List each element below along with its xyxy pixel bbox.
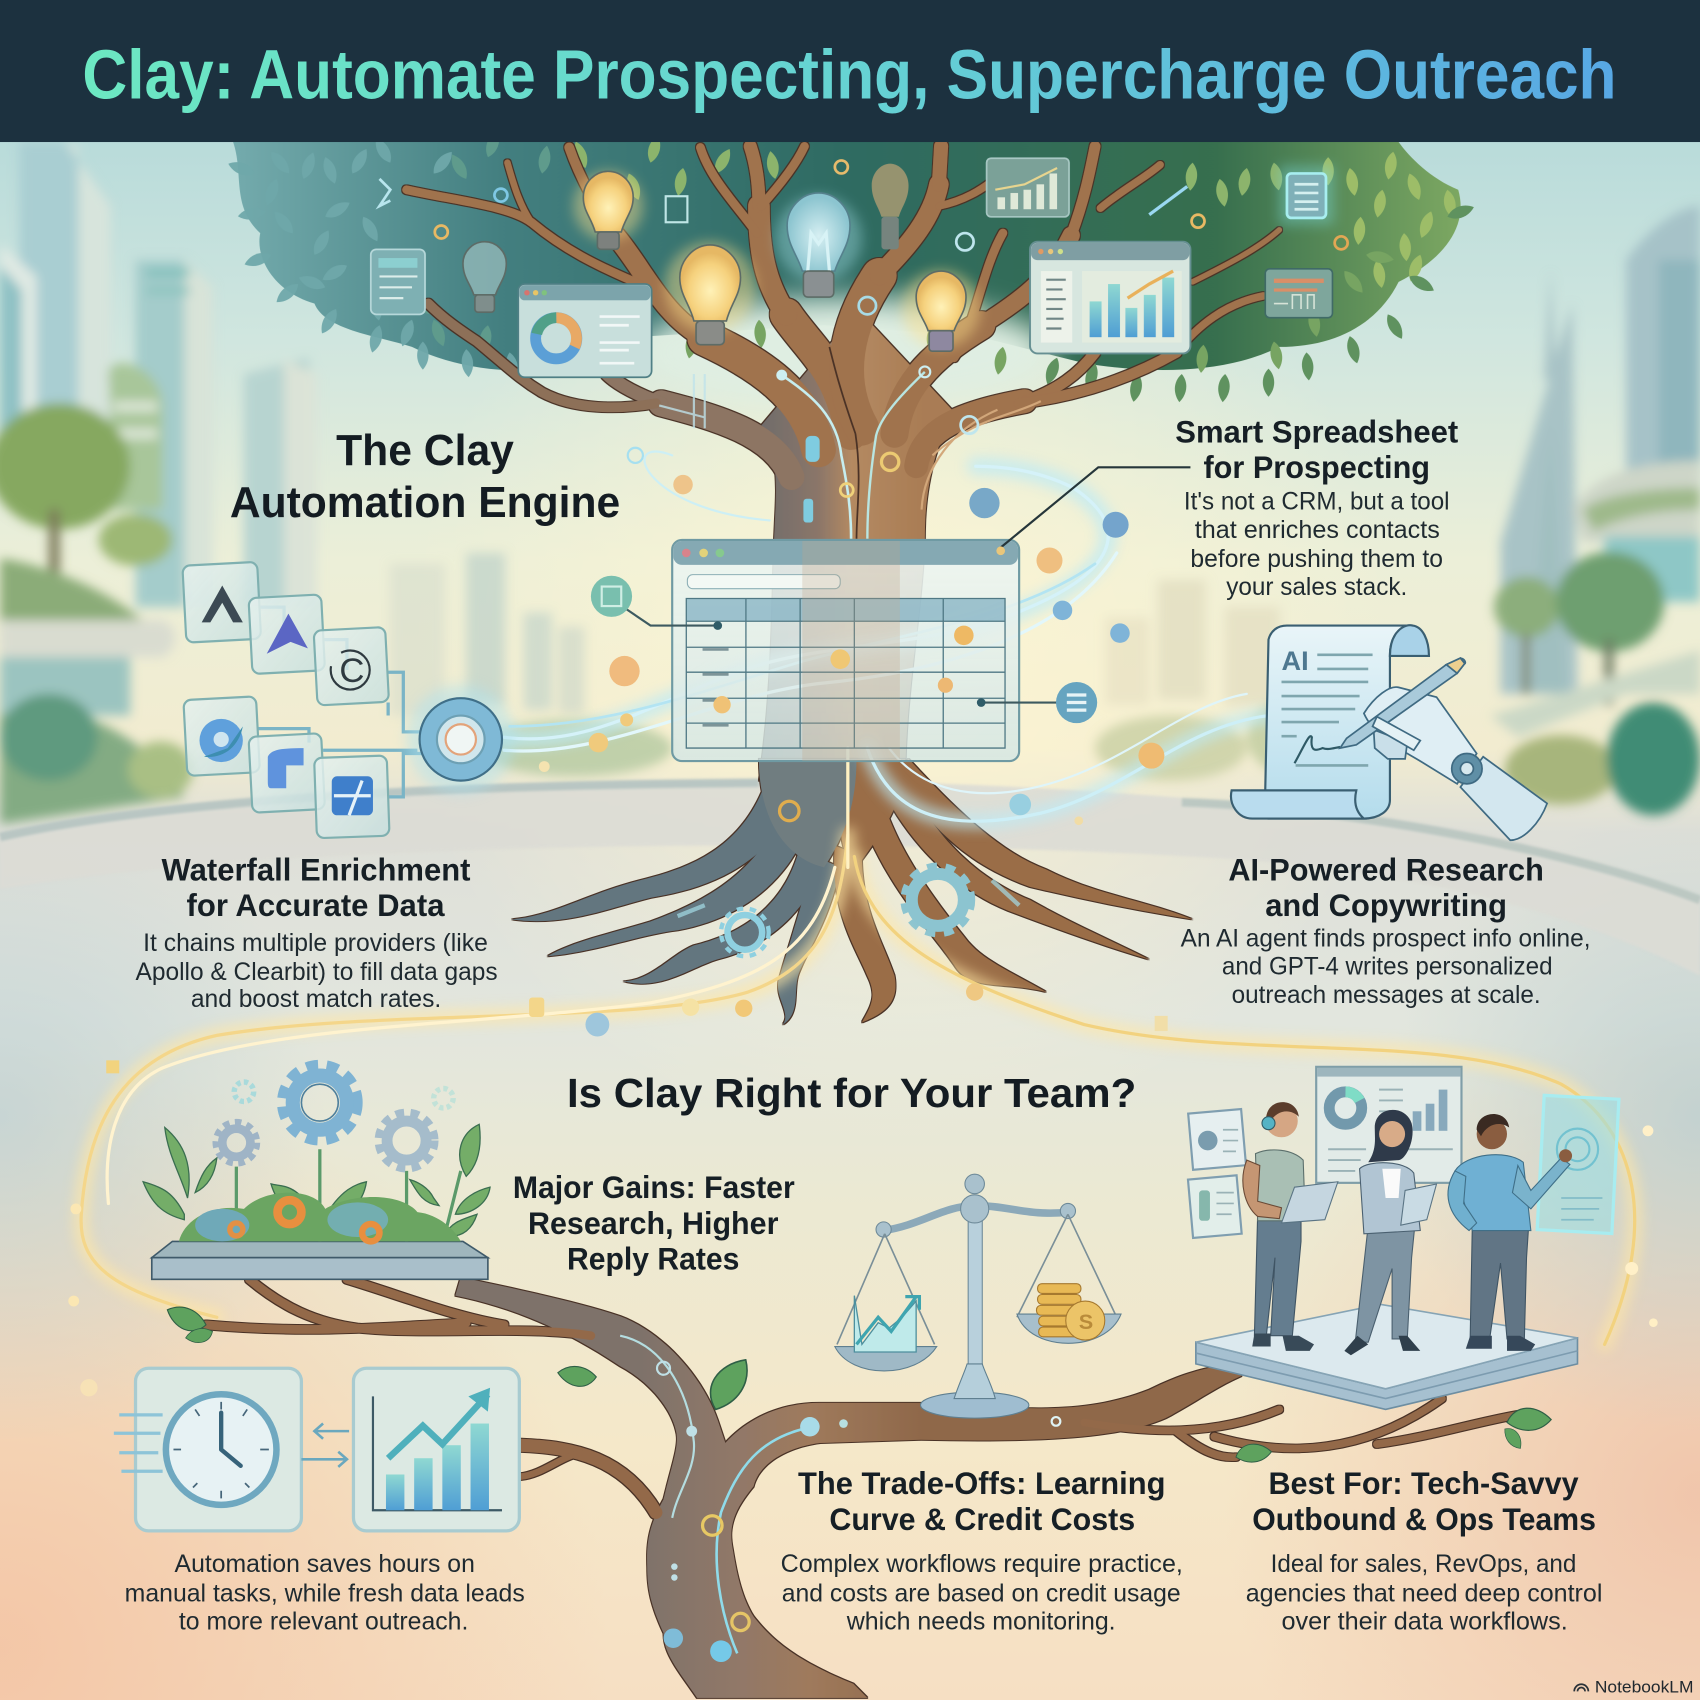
card: round logo	[183, 696, 260, 776]
screen: main dashboard	[1316, 1067, 1461, 1183]
text: smart spreadsheet: for Prospecting	[1203, 450, 1430, 485]
tray	[152, 1241, 488, 1279]
text: ai-powered research: and GPT-4 writes personalized	[1222, 953, 1553, 981]
data swirl ribbons	[504, 451, 1268, 821]
bulb: large yellow	[665, 242, 756, 345]
floating icons on stream	[68, 983, 1658, 1396]
text: waterfall enrichment: and boost match rates.	[191, 985, 441, 1013]
bulb: blue	[775, 193, 862, 297]
text: waterfall enrichment: It chains multiple providers (like	[143, 929, 488, 957]
person: man with laptop	[1243, 1102, 1338, 1351]
road	[0, 781, 1700, 976]
text: best for: Outbound & Ops Teams	[1252, 1502, 1596, 1537]
floating swirl icons	[539, 475, 1164, 825]
dashboard: large bar chart panel	[1030, 242, 1190, 353]
city skyline: left	[0, 142, 584, 824]
text: ai-powered research	[1181, 852, 1590, 1009]
icon: robot hand with pen	[1340, 658, 1547, 840]
text: major gains: Reply Rates	[567, 1242, 739, 1277]
text: automation saves hours: Automation saves hours on	[175, 1550, 475, 1578]
text: the trade-offs: Complex workflows require practice,	[781, 1550, 1183, 1578]
person: woman with tablet	[1344, 1110, 1437, 1355]
leaves on bottom branches	[164, 1305, 1553, 1468]
dashboard: chart card top	[987, 158, 1069, 217]
text: the trade-offs	[781, 1466, 1183, 1636]
right pan with coins: S	[1079, 1309, 1093, 1334]
icon: enrichment hub gear	[407, 685, 515, 794]
text: ai-powered research: An AI agent finds prospect info online,	[1181, 924, 1590, 952]
heading: the clay automation engine: The Clay	[336, 427, 514, 475]
gear garden illustration	[143, 1065, 490, 1279]
text: major gains	[513, 1170, 795, 1277]
callout line: smart spreadsheet	[1001, 467, 1190, 548]
card: blue A logo	[249, 594, 325, 674]
text: ai-powered research: outreach messages at scale.	[1232, 981, 1541, 1009]
card: rising chart	[353, 1368, 519, 1531]
left pan with chart	[835, 1296, 937, 1371]
text: ai-powered research: AI-Powered Research	[1228, 852, 1544, 887]
text: best for: agencies that need deep control	[1246, 1579, 1602, 1607]
text: smart spreadsheet: your sales stack.	[1226, 573, 1407, 601]
person: man pointing	[1448, 1114, 1572, 1351]
root gears and glow	[678, 866, 1019, 956]
bushes and small orange gears	[179, 1193, 461, 1241]
bulb: dim tan	[872, 164, 909, 249]
spreadsheet panel	[672, 540, 1019, 761]
plants	[236, 1149, 461, 1241]
tree canopy	[226, 129, 1476, 407]
text: best for: over their data workflows.	[1282, 1608, 1568, 1636]
arrows between cards	[301, 1424, 349, 1467]
AI scroll illustration	[1231, 625, 1429, 819]
text: best for: Best For: Tech-Savvy	[1268, 1466, 1579, 1501]
roots	[512, 759, 1193, 1025]
dashboard: small right card	[1265, 269, 1332, 318]
city skyline: right	[477, 206, 1700, 815]
lower tree branch system	[206, 1277, 1518, 1698]
text: smart spreadsheet: Smart Spreadsheet	[1175, 414, 1459, 449]
screen: small left lower	[1188, 1175, 1242, 1238]
provider cards and connectors	[182, 562, 428, 838]
screen: small left upper	[1188, 1109, 1246, 1170]
text: automation saves hours: manual tasks, while fresh data leads	[125, 1579, 525, 1607]
screen: holographic	[1537, 1095, 1619, 1234]
dashboard: small list card	[371, 249, 425, 314]
text: waterfall enrichment: for Accurate Data	[186, 888, 445, 923]
canopy glyph icons	[379, 160, 1348, 463]
golden data stream	[81, 748, 1635, 1344]
heading: the clay automation engine: Automation Engine	[230, 479, 620, 527]
gears	[216, 1065, 453, 1169]
text: the trade-offs: The Trade-Offs: Learning	[798, 1466, 1165, 1501]
bulb: upper left yellow	[574, 171, 643, 249]
heading: the clay automation engine	[230, 427, 620, 527]
card: C logo: C	[339, 652, 364, 690]
card: P logo	[249, 733, 325, 813]
text: major gains: Major Gains: Faster	[513, 1170, 795, 1205]
dashboard: donut panel	[518, 284, 652, 377]
trunk highlights and circuit lines	[659, 233, 1041, 539]
card: A logo	[182, 562, 261, 643]
text: automation saves hours	[125, 1550, 525, 1636]
bulb: right yellow	[902, 270, 980, 351]
watermark: notebooklm: NotebookLM	[1595, 1677, 1693, 1696]
text: best for: Ideal for sales, RevOps, and	[1271, 1550, 1576, 1578]
card: clock	[114, 1368, 301, 1531]
tree branches and trunk	[407, 146, 1279, 781]
team illustration	[1188, 1067, 1619, 1409]
text: ai-powered research: and Copywriting	[1265, 888, 1507, 923]
right pan with coins	[1017, 1284, 1121, 1343]
text: smart spreadsheet	[1175, 414, 1459, 601]
icon: document glow	[1279, 166, 1334, 224]
text: the trade-offs: and costs are based on credit usage	[782, 1579, 1181, 1607]
bulb: translucent gray	[463, 242, 506, 312]
text: smart spreadsheet: that enriches contacts	[1195, 516, 1440, 544]
text: major gains: Research, Higher	[528, 1206, 778, 1241]
heading: is clay right for your team: Is Clay Right for Your Team?	[567, 1070, 1136, 1116]
AI scroll illustration: AI	[1282, 645, 1309, 676]
balance scale	[835, 1174, 1121, 1418]
text: best for	[1246, 1466, 1602, 1636]
text: the trade-offs: which needs monitoring.	[846, 1608, 1116, 1636]
text: waterfall enrichment	[136, 852, 498, 1013]
text: smart spreadsheet: It's not a CRM, but a tool	[1184, 488, 1450, 516]
platform	[1196, 1304, 1577, 1409]
trunk	[759, 325, 954, 781]
card: C logo	[314, 627, 389, 705]
card: square logo	[314, 755, 390, 838]
text: waterfall enrichment: Apollo & Clearbit) to fill data gaps	[136, 958, 498, 986]
title banner	[0, 0, 1700, 142]
text: waterfall enrichment: Waterfall Enrichment	[162, 852, 471, 887]
text: the trade-offs: Curve & Credit Costs	[829, 1502, 1135, 1537]
branch circuit accents	[620, 1336, 1060, 1662]
text: smart spreadsheet: before pushing them to	[1190, 545, 1443, 573]
icon: list connector	[977, 682, 1097, 723]
icon: connector callout to sheet	[591, 576, 722, 630]
light bulbs	[463, 164, 980, 351]
text: automation saves hours: to more relevant outreach.	[179, 1608, 468, 1636]
